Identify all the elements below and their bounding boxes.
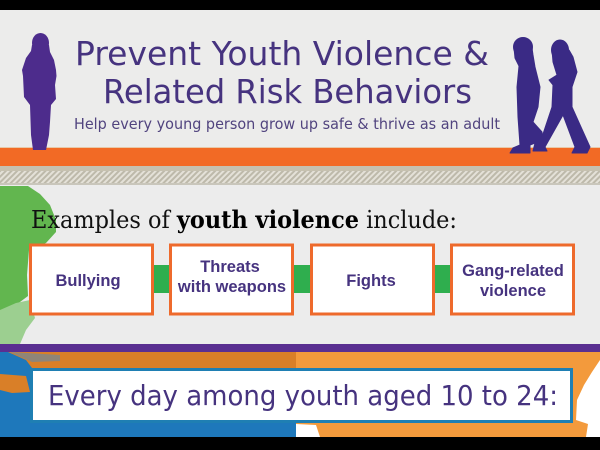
bottom paint panel (0, 352, 600, 437)
section heading: Examples of youth violence include: (31, 205, 457, 234)
striped divider (0, 171, 600, 184)
box: Bullying (30, 245, 152, 314)
title: Related Risk Behaviors (103, 72, 472, 111)
green paint splash (0, 186, 56, 312)
callout: every day among youth (32, 370, 572, 422)
icon: two walking figures silhouette (510, 38, 590, 153)
connector: green bars (154, 265, 451, 293)
header panel (0, 10, 600, 185)
box: Threats with weapons: with weapons (177, 278, 286, 296)
box: Gang-related violence: Gang-related (462, 262, 564, 280)
box: Fights (312, 245, 434, 314)
title: Prevent Youth Violence & (75, 34, 489, 73)
box: Threats with weapons: Threats (200, 258, 260, 276)
box: Fights: Fights (346, 272, 396, 290)
icon: standing girl silhouette (22, 33, 56, 150)
box: Gang-related violence: violence (480, 282, 546, 300)
purple divider band (0, 344, 600, 352)
subtitle: Help every young person grow up safe & thrive as an adult (74, 115, 500, 133)
box: Threats with weapons (170, 245, 292, 314)
callout: every day among youth: Every day among youth aged 10 to 24: (48, 380, 558, 412)
examples panel background (0, 185, 600, 344)
orange ground band (0, 148, 600, 166)
box: Gang-related violence (452, 245, 574, 314)
box: Bullying: Bullying (55, 272, 121, 290)
title (75, 34, 489, 111)
